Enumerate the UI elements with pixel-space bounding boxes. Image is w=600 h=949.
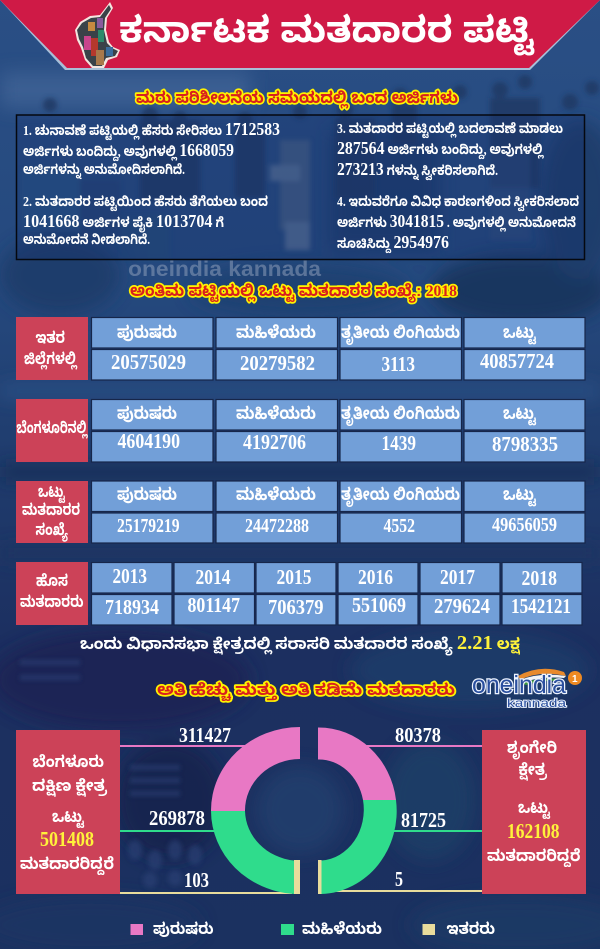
text: item 4: ಅರ್ಜಿಗಳು 3041815 . ಅವುಗಳಲ್ಲಿ ಅನುಮೋದನೆ (337, 211, 576, 232)
heading: final list total: ಅಂತಿಮ ಪಟ್ಟಿಯಲ್ಲಿ ಒಟ್ಟು ಮತದಾರರ ಸಂಖ್ಯೆ: 2018 (130, 283, 457, 303)
legend: ಪುರುಷರು (153, 921, 214, 938)
table: other districts: 40857724 (480, 349, 554, 373)
panel: Bengaluru South: ಒಟ್ಟು (52, 809, 85, 829)
table: Bengaluru: ಬೆಂಗಳೂರಿನಲ್ಲಿ (16, 420, 88, 439)
panel: Sringeri: ಒಟ್ಟು (518, 800, 551, 820)
panel: Bengaluru South: ದಕ್ಷಿಣ ಕ್ಷೇತ್ರ (32, 778, 108, 797)
panel: Sringeri: ಕ್ಷೇತ್ರ (518, 762, 548, 781)
heading: applications received: ಮರು ಪರಿಶೀಲನೆಯ ಸಮಯದಲ್ಲಿ ಬಂದ ಅರ್ಜಿಗಳು (136, 90, 458, 109)
legend: ಮಹಿಳೆಯರು (302, 921, 382, 938)
table: total voters: ಒಟ್ಟು (38, 484, 66, 504)
table: other districts: 3113 (382, 352, 415, 376)
table: new voters by year: 801147 (188, 593, 240, 617)
table: total voters: ಮಹಿಳೆಯರು (236, 485, 316, 504)
table: other districts: ಜಿಲ್ಲೆಗಳಲ್ಲಿ (24, 351, 77, 370)
table: new voters by year: 706379 (268, 595, 324, 619)
title: ಕರ್ನಾಟಕ ಮತದಾರರ ಪಟ್ಟಿ (119, 9, 535, 56)
text: average voters per constituency: ಒಂದು ವಿಧಾನಸಭಾ ಕ್ಷೇತ್ರದಲ್ಲಿ ಸರಾಸರಿ ಮತದಾರರ ಸಂಖ್ಯೆ 2.21 ಲಕ್ಷ (80, 632, 520, 656)
panel: applications text box (16, 115, 584, 260)
logo: oneindia kannada: kannada (507, 696, 566, 710)
table: new voters by year: ಮತದಾರರು (20, 594, 84, 611)
chart: value labels: 5 (395, 867, 403, 891)
table: total voters: ಒಟ್ಟು (503, 485, 536, 507)
table: Bengaluru: ಪುರುಷರು (117, 404, 177, 423)
text: item 3: 287564 ಅರ್ಜಿಗಳು ಬಂದಿದ್ದು, ಅವುಗಳಲ್ಲಿ (337, 138, 544, 160)
text: item 1 (23, 119, 280, 180)
chart: value labels (149, 723, 446, 892)
table: total voters: ಮತದಾರರ (22, 502, 80, 519)
title banner (0, 0, 600, 70)
table: other districts: 20279582 (240, 351, 315, 375)
table: Bengaluru: ಮಹಿಳೆಯರು (236, 404, 316, 423)
table: new voters by year: 2018 (522, 566, 557, 590)
table: Bengaluru: 4192706 (243, 430, 306, 454)
chart: value labels: 81725 (401, 808, 446, 832)
table: total voters: 24472288 (245, 516, 309, 537)
icon: Karnataka map collage (75, 2, 120, 68)
text: item 2: 1041668 ಅರ್ಜಿಗಳ ಪೈಕಿ 1013704 ಗೆ (23, 211, 224, 234)
table: other districts: 20575029 (111, 350, 186, 374)
table: new voters by year: 2016 (358, 565, 393, 589)
text: item 2 (23, 194, 268, 247)
text: item 2: ಅನುಮೋದನೆ ನೀಡಲಾಗಿದೆ. (23, 232, 150, 247)
logo: oneindia kannada: 1 (572, 674, 578, 685)
logo: oneindia kannada: oneindia (472, 671, 566, 699)
text: item 3: 273213 ಗಳನ್ನು ಸ್ವೀಕರಿಸಲಾಗಿದೆ. (337, 159, 498, 181)
table: total voters: ತೃತೀಯ ಲಿಂಗಿಯರು (341, 485, 460, 507)
table: other districts: ಒಟ್ಟು (503, 323, 536, 345)
panel: Sringeri (482, 730, 586, 894)
text: item 3: 3. ಮತದಾರರ ಪಟ್ಟಿಯಲ್ಲಿ ಬದಲಾವಣೆ ಮಾಡಲು (337, 121, 563, 139)
table: Bengaluru: ಒಟ್ಟು (503, 404, 536, 426)
table: new voters by year (16, 562, 582, 625)
panel: Bengaluru South: 501408 (40, 827, 94, 851)
panel: Bengaluru South (16, 730, 120, 894)
text: item 1: 1. ಚುನಾವಣೆ ಪಟ್ಟಿಯಲ್ಲಿ ಹೆಸರು ಸೇರಿಸಲು 1712583 (23, 119, 280, 141)
table: total voters: 4552 (384, 516, 415, 537)
table: other districts: ತೃತೀಯ ಲಿಂಗಿಯರು (341, 323, 460, 345)
crowd silhouettes (43, 75, 599, 200)
table: new voters by year: 2015 (276, 565, 312, 589)
text: item 3 (337, 121, 563, 181)
panel: Sringeri: 162108 (507, 819, 560, 843)
table: Bengaluru: ತೃತೀಯ ಲಿಂಗಿಯರು (341, 404, 460, 426)
panel: Bengaluru South: ಮತದಾರರಿದ್ದರೆ (20, 856, 114, 876)
chart: donut Bengaluru South (211, 727, 300, 894)
table: new voters by year: 2017 (440, 565, 475, 589)
table: new voters by year: 1542121 (511, 594, 571, 618)
text: item 4 (337, 194, 579, 254)
panel: Sringeri: ಮತದಾರರಿದ್ದರೆ (487, 848, 580, 868)
text: item 2: 2. ಮತದಾರರ ಪಟ್ಟಿಯಿಂದ ಹೆಸರು ತೆಗೆಯಲು ಬಂದ (23, 194, 268, 212)
table: other districts: ಇತರ (36, 330, 65, 347)
table: new voters by year: ಹೊಸ (36, 573, 68, 590)
table: other districts (16, 317, 585, 380)
table: Bengaluru: 1439 (382, 431, 416, 455)
chart: donut Sringeri (318, 727, 397, 894)
table: Bengaluru (16, 399, 585, 462)
table: other districts: ಮಹಿಳೆಯರು (236, 323, 316, 342)
logo: oneindia kannada (472, 669, 582, 710)
fabric pattern hints (20, 660, 202, 888)
table: new voters by year: 2013 (112, 564, 147, 588)
table: new voters by year: 2014 (196, 565, 231, 589)
legend: ಇತರರು (446, 921, 495, 938)
table: new voters by year: 551069 (352, 593, 406, 617)
chart: value labels: 311427 (179, 723, 231, 747)
watermark: oneindia kannada (128, 258, 321, 281)
table: total voters: ಪುರುಷರು (117, 485, 177, 504)
chart: value labels: 80378 (395, 723, 441, 747)
table: total voters (16, 481, 585, 543)
text: item 1: ಅರ್ಜಿಗಳನ್ನು ಅನುಮೋದಿಸಲಾಗಿದೆ. (23, 162, 185, 180)
text: item 4: ಸೂಚಿಸಿದ್ದು 2954976 (337, 232, 449, 254)
legend (130, 921, 495, 938)
table: new voters by year: 279624 (434, 594, 490, 618)
text: item 1: ಅರ್ಜಿಗಳು ಬಂದಿದ್ದು, ಅವುಗಳಲ್ಲಿ 1668059 (23, 140, 234, 162)
panel: Sringeri: ಶೃಂಗೇರಿ (507, 740, 557, 760)
table: total voters: ಸಂಖ್ಯೆ (36, 522, 68, 542)
heading: highest and lowest voters: ಅತಿ ಹೆಚ್ಚು ಮತ್ತು ಅತಿ ಕಡಿಮೆ ಮತದಾರರು (157, 682, 455, 702)
table: Bengaluru: 8798335 (492, 432, 558, 456)
chart: leader lines (120, 745, 482, 894)
table: new voters by year: 718934 (105, 595, 159, 619)
table: total voters: 25179219 (117, 516, 180, 537)
table: total voters: 49656059 (492, 515, 557, 536)
table: other districts: ಪುರುಷರು (117, 323, 177, 342)
panel: Bengaluru South: ಬೆಂಗಳೂರು (32, 754, 104, 771)
chart: value labels: 269878 (149, 806, 205, 830)
table: Bengaluru: 4604190 (118, 429, 180, 453)
chart: value labels: 103 (184, 868, 209, 892)
